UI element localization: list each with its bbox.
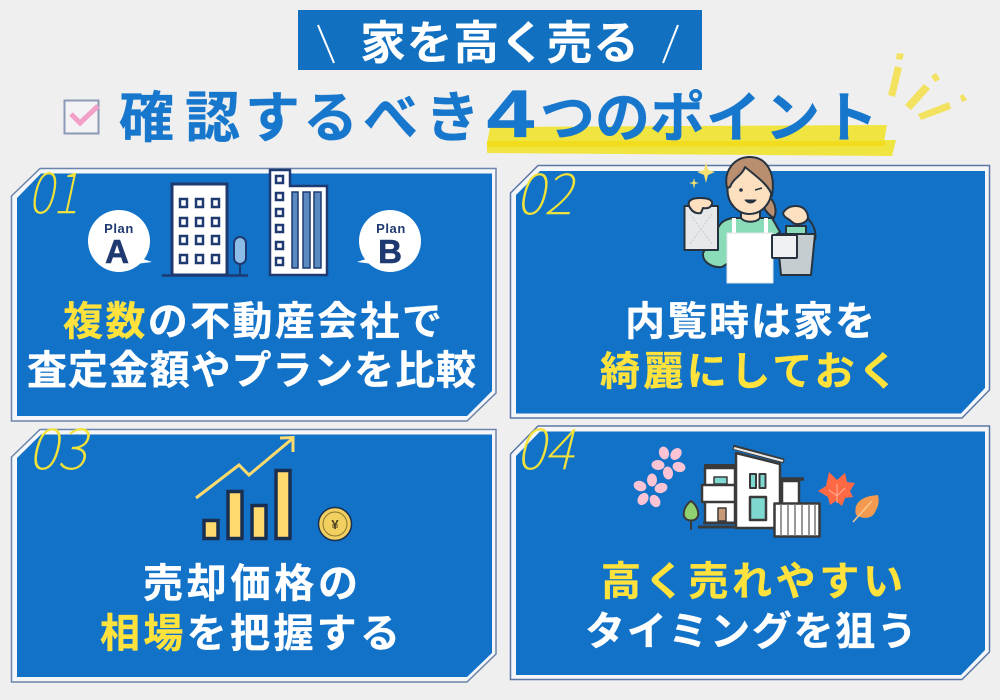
icon: house <box>698 447 820 536</box>
icon: Plan A bubble: A <box>105 233 129 270</box>
icon: tree <box>684 501 698 530</box>
bucket handle <box>805 216 816 240</box>
icon: rising bar chart <box>196 438 293 538</box>
icon: tower building <box>270 170 327 275</box>
icon: Plan A bubble <box>88 210 152 272</box>
yellow marker highlight <box>487 125 896 156</box>
body and sleeves <box>703 218 780 267</box>
title: 4 <box>487 77 534 152</box>
apron straps <box>734 218 766 233</box>
bucket <box>777 234 815 275</box>
heading banner <box>298 10 702 70</box>
panel 04 text: 高く売れやすい <box>601 560 903 604</box>
icon: Plan B bubble <box>357 210 421 272</box>
icon: Plan A bubble: Plan <box>104 221 134 236</box>
panel: 03 market price <box>12 405 496 682</box>
heading banner: 家を高く売る <box>360 17 639 69</box>
panel 01 text: 複数の不動産会社で <box>63 300 442 344</box>
neck <box>741 208 760 222</box>
panel 02 text: 綺麗にしておく <box>600 350 898 394</box>
panel 03 text: 相場を把握する <box>100 612 400 656</box>
number 03: 03 <box>28 405 91 485</box>
icon: office building <box>162 184 248 276</box>
icon: checkbox <box>64 100 98 134</box>
icon: Plan B bubble: Plan <box>376 221 406 236</box>
icon: maple leaf <box>818 472 855 506</box>
title <box>119 77 878 152</box>
head <box>728 166 772 214</box>
icon: yen coin <box>318 508 352 540</box>
number 04: 04 <box>516 405 575 485</box>
paper <box>684 206 718 250</box>
panel: 04 timing <box>510 405 990 680</box>
panel 03 text: 売却価格の <box>143 562 358 606</box>
icon: autumn leaf <box>853 495 879 522</box>
title: 確認するべき <box>119 87 480 149</box>
panel: 01 compare companies <box>12 149 496 421</box>
ponytail <box>763 196 776 218</box>
panel 01 text: 査定金額やプランを比較 <box>27 349 476 393</box>
icon: Plan B bubble: B <box>378 233 402 270</box>
panel 02 text <box>600 300 898 394</box>
panel 04 text: タイミングを狙う <box>585 610 917 654</box>
apron <box>727 233 773 283</box>
icon: cherry blossoms <box>632 445 687 509</box>
number 02: 02 <box>516 150 576 230</box>
panel 02 text: 内覧時は家を <box>625 300 875 344</box>
panel 03 text <box>100 562 400 656</box>
icon: yen coin: ¥ <box>331 517 339 532</box>
title: つのポイント <box>540 87 878 149</box>
icon: woman with bucket <box>684 157 816 283</box>
panel 04 text <box>585 560 917 654</box>
panel 01 text <box>27 300 476 393</box>
panel: 02 clean the house <box>510 150 990 418</box>
number 01: 01 <box>28 149 78 229</box>
icon: emphasis rays <box>888 53 967 120</box>
